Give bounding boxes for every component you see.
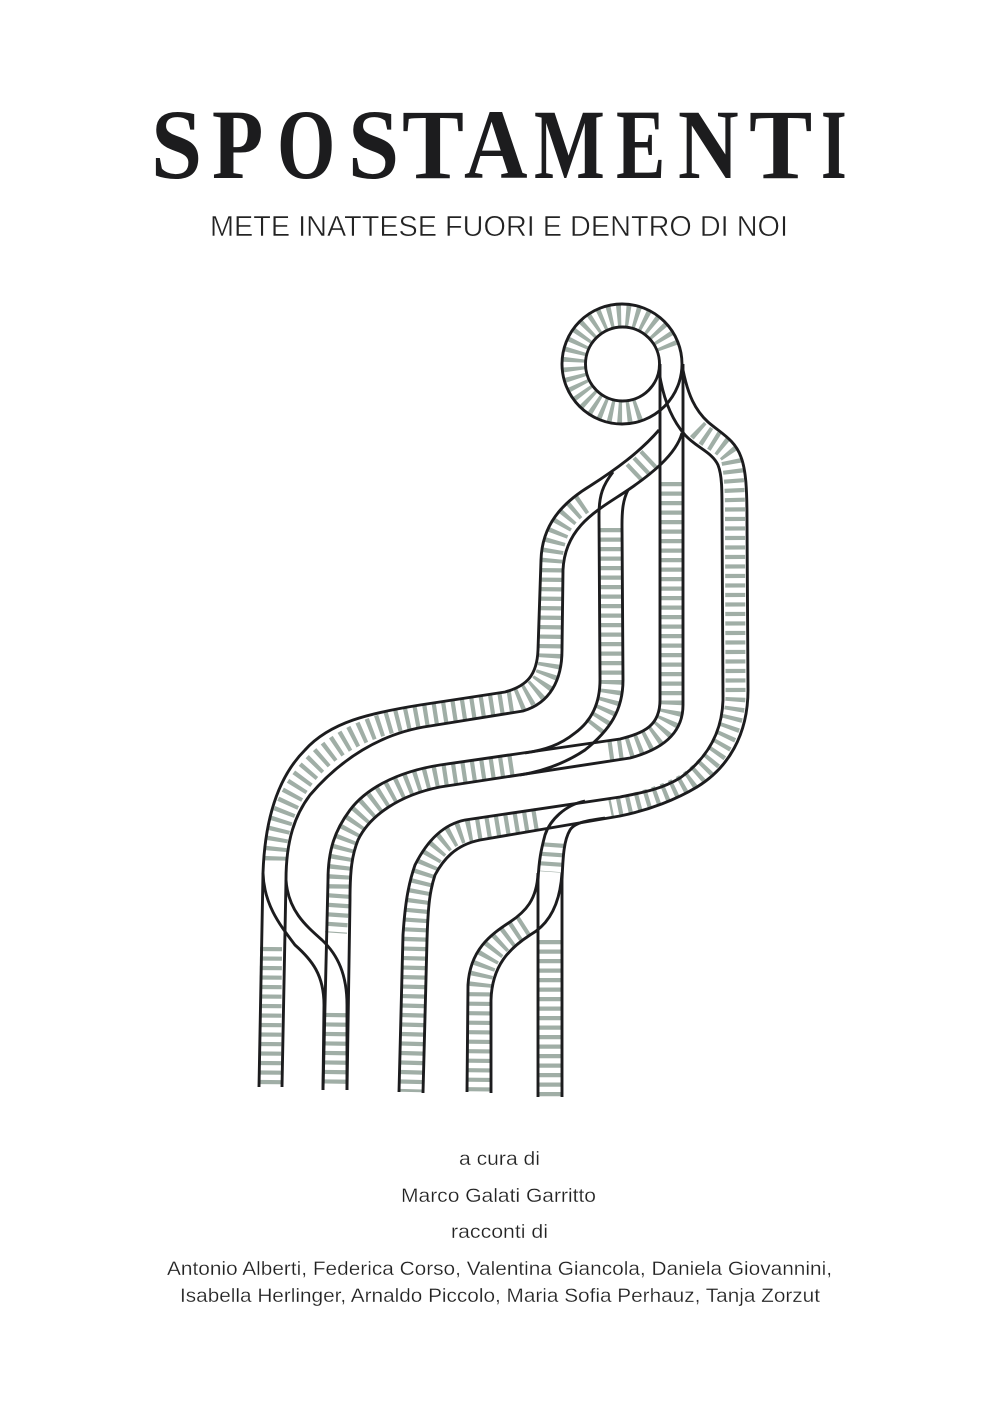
title <box>151 88 847 201</box>
credits: editor name: Marco Galati Garritto <box>401 1185 596 1207</box>
title: M <box>534 90 605 201</box>
title: T <box>402 89 464 200</box>
title: S <box>151 88 202 200</box>
title: A <box>464 90 528 200</box>
illustration: seated figure made of railway tracks <box>259 304 748 1097</box>
title: S <box>348 88 399 200</box>
railway sleepers <box>270 315 736 1097</box>
subtitle: METE INATTESE FUORI E DENTRO DI NOI <box>210 211 788 243</box>
credits: racconti di: racconti di <box>451 1221 548 1243</box>
credits: authors: Isabella Herlinger, Arnaldo Piccolo, Maria Sofia Perhauz, Tanja Zorzut <box>180 1285 821 1307</box>
title: P <box>212 89 263 200</box>
credits: authors <box>167 1258 832 1307</box>
title: T <box>749 90 812 201</box>
title: O <box>277 90 335 201</box>
title: I <box>821 91 847 200</box>
credits: a cura di: a cura di <box>459 1148 540 1170</box>
title: N <box>678 89 739 200</box>
railway rails <box>259 304 748 1097</box>
credits: authors: Antonio Alberti, Federica Corso, Valentina Giancola, Daniela Giovannini, <box>167 1258 832 1280</box>
title: E <box>616 90 665 201</box>
